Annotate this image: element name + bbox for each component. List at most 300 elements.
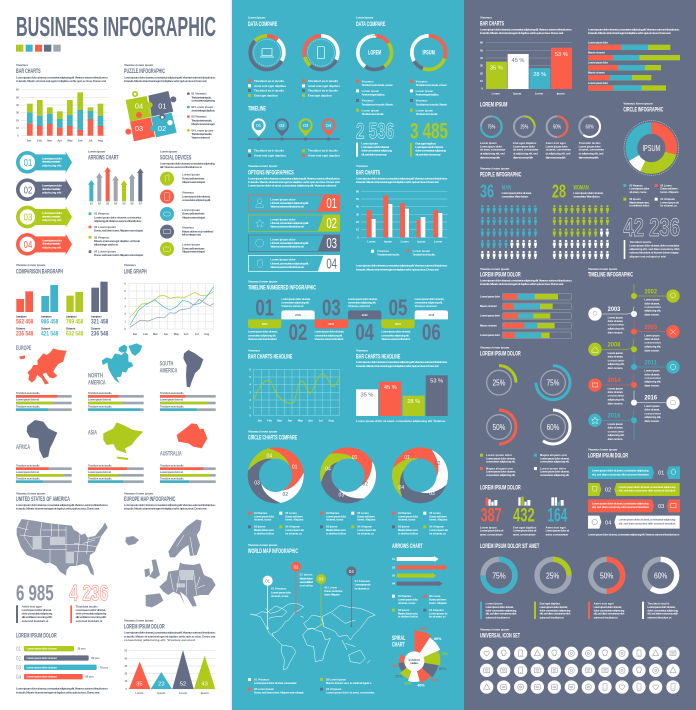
horizontal bars: Lorem ipsum dolor sit amet xyxy=(27,656,57,660)
teal bar chart: 40 xyxy=(356,205,359,209)
donut 2 phone xyxy=(304,36,338,70)
timeline xyxy=(248,105,340,141)
spiral chart: 60% xyxy=(434,637,442,641)
timeline infographic heading: TIMELINE INFOGRAPHIC xyxy=(588,272,633,279)
spiral chart: BUSINESS xyxy=(409,658,420,662)
universal icon set: Vivamus lorem ipsum xyxy=(480,628,510,632)
social devices list: Lorem Ipsum xyxy=(182,173,200,177)
timeline captions: Lorem ipsum xyxy=(608,386,624,390)
progress bars: Lorem ipsum dolor xyxy=(480,294,500,298)
dual rings legend: consectetur adipiscing elit, xyxy=(540,473,570,477)
swirl chart 3: 03 xyxy=(429,491,435,497)
triangle chart: Lorem xyxy=(179,691,188,695)
lorem ipsum small rings: ut adipiscing elit, sed xyxy=(579,151,604,155)
dual rings heading: LOREM IPSUM DOLOR xyxy=(480,350,521,357)
line graph: 0 xyxy=(124,327,126,331)
stat 42 236 xyxy=(623,215,680,259)
arrows chart legend: tellus integer erat leo at xyxy=(94,243,118,247)
map pins: 02 xyxy=(294,564,299,569)
timeline captions: Vivamus euismod xyxy=(415,304,437,308)
map: africa: AFRICA xyxy=(16,444,30,451)
comparison heading: Vivamus lorem ipsum xyxy=(16,263,46,267)
swirl legends: 04 Aliquam xyxy=(285,525,301,529)
timeline captions: consectetur adipiscing elit. xyxy=(315,333,343,337)
puzzle graphic: 04 xyxy=(135,101,143,110)
mini-bar stats: LOREM IPSUM DOLOR xyxy=(480,484,521,491)
map: south america: SOUTH xyxy=(160,361,174,368)
lorem ipsum small rings: diam nonummy nibh xyxy=(579,155,599,159)
teal chart legend: Lorem ipsum dolor sit amet, consectetur adipiscing elit. Vivamus euismod tincidunt eu xyxy=(356,264,447,268)
panel: slate column xyxy=(464,0,696,710)
dual rings: 50% xyxy=(493,422,506,432)
timeline infographic heading xyxy=(588,267,633,279)
progress heading: in iaculis. Mauris sit amet erat eget mi dapibus vehic quis ac risus. Donec erat xyxy=(480,282,563,286)
comparison values: Lorem ipsum xyxy=(41,315,52,319)
puzzle heading: Lorem ipsum dolor sit amet, consectetur adipiscing elit. Vivamus euismod tincidunt eu xyxy=(124,75,215,79)
stacked horizontal bars: Mauris sit amet xyxy=(588,51,605,55)
slate bar chart: 35 % xyxy=(490,66,503,72)
horizontal bars: 03 xyxy=(16,665,21,672)
swirl legends: 02 Lorem xyxy=(429,511,441,515)
arrow label 03: adipiscing elit. xyxy=(42,218,62,222)
lorem ipsum small rings: 75% xyxy=(487,124,496,130)
timeline captions: adipiscing elit, xyxy=(644,309,661,313)
puzzle heading xyxy=(124,63,215,83)
triangle chart heading: Vivamus lorem ipsum xyxy=(124,618,154,622)
arrow label 04 xyxy=(16,233,72,256)
swirl legends: 02 Lorem xyxy=(285,511,297,515)
option row 01 xyxy=(248,195,340,212)
stacked bar chart: Apr xyxy=(57,138,62,142)
map progress bars row 1: Tincidunt ea in iaculis. xyxy=(16,404,40,408)
timeline numbered heading: TIMELINE NUMBERED INFOGRAPHIC xyxy=(248,284,316,291)
data compare heading right: DATA COMPARE xyxy=(356,21,385,28)
donut legend left: Erat eget dapibus xyxy=(308,94,332,98)
large ring captions: euismod tincidunt ut xyxy=(647,615,671,619)
stat 42 236: euismod tincidunt ut laoreet dolore magna xyxy=(629,251,679,255)
arrows chart legend xyxy=(89,212,143,257)
data compare heading left xyxy=(248,16,277,28)
curve chart: 2 xyxy=(249,398,251,402)
triangle chart: 52 xyxy=(180,682,186,688)
world map legend: Lorem ipsum dolor sit amet, consectetur xyxy=(254,681,297,685)
horizontal bars: 01 xyxy=(16,646,21,653)
horizontal bars: Lorem ipsum dolor sit amet xyxy=(27,665,57,669)
timeline captions: consectetur adipiscing elit. xyxy=(415,301,443,305)
large rings: 25% xyxy=(546,570,560,580)
swirl legends: 04 Aliquam xyxy=(429,525,445,529)
stacked bar chart: 20 xyxy=(16,118,19,122)
timeline captions: diam nonum. xyxy=(644,384,660,388)
map progress bars row 1 xyxy=(16,391,216,411)
comparison bars xyxy=(16,282,108,312)
mini-bar stats: 432 xyxy=(513,506,535,527)
data compare heading left: DATA COMPARE xyxy=(248,21,277,28)
arrow label 01 xyxy=(16,151,72,174)
timeline captions: consectetur adipiscing elit. xyxy=(248,333,276,337)
timeline captions: Lorem ipsum dolor sit amet, xyxy=(415,297,444,301)
curve chart: 3 xyxy=(249,390,251,394)
line graph: Feb xyxy=(143,332,148,336)
swirl legends: 01 Vivamus xyxy=(398,511,412,515)
triangle chart heading: in iaculis. Mauris sit amet erat eget mi dapibus vehic quis ac risus. Donec erat xyxy=(124,634,215,638)
timeline captions: adipiscing elit, xyxy=(644,344,661,348)
ribbon row 02 xyxy=(588,483,680,496)
ribbons heading: LOREM IPSUM DOLOR xyxy=(588,452,628,459)
curve chart: Mar xyxy=(277,418,282,422)
donut legend left: Tincidunt ea in iaculis xyxy=(254,79,284,83)
swirl legends: Lorem ipsum do xyxy=(357,528,376,532)
timeline captions: consectetur xyxy=(608,429,624,433)
options heading: Vivamus lorem ipsum xyxy=(248,164,278,168)
puzzle legend: consectetur adipiscing. xyxy=(191,99,215,103)
large ring captions: Lorem ipsum dolor sit amet, xyxy=(486,605,514,609)
map pins: lor sit amet, co xyxy=(355,586,370,590)
line graph: Jan xyxy=(133,332,138,336)
map progress bars row 2: Lorem ipsum dolor sit. xyxy=(88,470,112,474)
triangle chart xyxy=(124,649,215,695)
line graph: Jun xyxy=(184,332,189,336)
ribbon row 01: 01 xyxy=(658,471,664,477)
timeline years: 2016 xyxy=(644,395,657,402)
triangle chart: Lorem xyxy=(135,691,144,695)
dual rings: 75% xyxy=(547,378,560,388)
circle charts heading: Vivamus lorem ipsum xyxy=(248,429,278,433)
usa heading: Lorem ipsum dolor sit amet, consectetur adipiscing elit. Vivamus euismod tincidunt eu xyxy=(16,503,108,507)
large ring captions: dolor consectetur adipiscing xyxy=(647,608,678,612)
swirl legends: Mauris dictum sem, xyxy=(254,528,274,532)
map pins: Mauris dictum xyxy=(300,576,314,580)
stat 4 236: dolor consectetur adipiscing xyxy=(76,611,106,615)
donut legend right: Lorem Ipsum xyxy=(416,108,434,112)
arrow label 01: 01 xyxy=(24,158,33,169)
curve chart: Jan xyxy=(257,418,262,422)
social devices list: Lorem Ipsum xyxy=(182,208,200,212)
arrows chart: 01 xyxy=(90,202,93,206)
swirl legends: Lorem ipsum do xyxy=(285,528,304,532)
timeline captions: consectetur xyxy=(644,376,661,380)
lorem ipsum small rings: sit amet, consectetur xyxy=(579,148,604,152)
swirl legends: Mauris dictum sem, xyxy=(326,528,346,532)
arrows chart heading xyxy=(88,150,119,162)
swirl legends: 02 Lorem xyxy=(357,511,369,515)
timeline captions: Lorem ipsum xyxy=(644,333,660,337)
map progress bars row 2: Lorem ipsum dolor sit. xyxy=(16,470,40,474)
timeline captions: adipiscing elit, xyxy=(644,415,661,419)
stacked horizontal bars xyxy=(588,41,680,91)
big percentage bars: 53 % xyxy=(430,379,443,385)
circle infographic legend: 02 Lorem xyxy=(660,183,672,187)
lorem ipsum small rings: diam nonummy nibh xyxy=(546,155,566,159)
teal bar chart: Lorem xyxy=(401,239,409,243)
bar charts heading: Vivamus xyxy=(16,63,28,67)
triangle chart: 50 xyxy=(124,649,128,653)
slate bar charts heading: in iaculis. Mauris sit amet erat eget mi dapibus vehic quis ac risus. Donec erat xyxy=(480,31,563,35)
arrows chart legend xyxy=(392,594,448,619)
usa heading: in iaculis. Mauris sit amet erat eget mi dapibus vehic quis ac risus. Donec erat xyxy=(16,507,99,511)
arrows chart legend: sit amet, conse xyxy=(398,601,416,605)
timeline captions: dolor sit amet, xyxy=(644,408,660,412)
map: north america xyxy=(88,343,142,386)
donut 4 ipsum xyxy=(412,36,446,70)
timeline legend xyxy=(248,149,340,158)
map progress bars row 1: Lorem ipsum dolor sit. xyxy=(88,398,112,402)
donut legend right: Lorem Ipsum xyxy=(416,89,434,93)
timeline legend: Amet erat eget dapibus xyxy=(254,154,286,158)
circle infographic legend: Donec sed lorem xyxy=(660,187,678,191)
arrows chart legend: Donec sed lorem tortor. Aliquam erat volutpat. xyxy=(94,253,143,257)
ribbons heading: Vivamus lorem ipsum xyxy=(588,447,618,451)
swirl chart 1 xyxy=(248,447,304,503)
option row 03: Vivamus euismod tincidunt eu in. xyxy=(270,245,304,249)
dual rings xyxy=(482,366,570,444)
large ring captions: Lorem ipsum dolor sit amet, xyxy=(594,605,622,609)
ribbon row 02: 02 xyxy=(605,488,611,494)
stat 6 985 xyxy=(16,581,54,623)
puzzle legend: Tincidunt ea in iaculis, xyxy=(191,95,211,99)
teal bar charts heading xyxy=(356,164,447,184)
teal bar chart: 30 xyxy=(356,212,359,216)
arrow label 04: sit amet, consectetur xyxy=(42,242,61,246)
spiral chart: 80% xyxy=(420,627,428,631)
timeline captions: Lorem ipsum xyxy=(644,298,660,302)
arrow label 01: Lorem ipsum dolor xyxy=(42,156,63,160)
comparison values: 562 458 xyxy=(16,319,34,326)
timeline infographic heading: Vivamus lorem ipsum xyxy=(588,267,618,271)
map progress bars row 1: Tincidunt ea in iaculis. xyxy=(160,391,184,395)
puzzle legend: amet erat eget dapibus. xyxy=(191,109,215,113)
slate bar chart: 45 % xyxy=(512,58,524,64)
progress heading xyxy=(480,267,572,286)
stat 6 985: Amet erat eget xyxy=(22,605,42,609)
swirl legends: in eleifend tellus xyxy=(254,531,275,535)
option row 01: Vivamus euismod tincidunt eu in. xyxy=(270,205,304,209)
stat 3 485: dolor consectetur adipiscing xyxy=(415,149,446,153)
people infographic: MAN xyxy=(502,185,512,192)
teal bar charts heading: Vivamus xyxy=(356,164,368,168)
slate bar chart: 60 xyxy=(480,41,483,45)
slate bar chart: 28 % xyxy=(533,72,546,78)
swirl chart 3: 02 xyxy=(435,461,441,467)
map: europe xyxy=(16,345,67,384)
teal chart legend: Tincidunt ea in iaculis. xyxy=(413,253,436,257)
donut legend right: Vivamus xyxy=(362,99,374,103)
arrows chart: 05 xyxy=(123,202,126,206)
usa and europe maps section xyxy=(16,491,216,695)
dual rings legend: consectetur adipiscing elit, xyxy=(486,460,516,464)
teal chart legend: Tincidunt ea in iaculis. xyxy=(377,253,400,257)
arrows chart legend: adipiscing elit. Vivamus euismod tincidunt eu xyxy=(94,219,141,223)
large rings: LOREM IPSUM DOLOR SIT AMET xyxy=(480,543,539,550)
arrows chart legend: 04 Aliquam xyxy=(429,608,444,612)
dual rings heading xyxy=(480,345,521,357)
triangle chart: 35 xyxy=(136,682,142,688)
lorem ipsum small rings: Lorem ipsum dolor xyxy=(546,144,568,148)
comparison values: Lorem ipsum xyxy=(16,315,27,319)
stacked bar chart: 10 xyxy=(16,126,19,130)
europe map heading: Lorem ipsum dolor sit amet, consectetur adipiscing elit. Vivamus euismod tincidunt eu xyxy=(124,503,215,507)
people infographic: Lorem ipsum dolor sit amet, xyxy=(502,191,532,195)
stat 6 985: Lorem ipsum dolor sit amet, xyxy=(22,608,52,612)
timeline legend: Amet erat eget dapibus xyxy=(308,154,340,158)
timeline captions: Lorem ipsum dolor sit amet, xyxy=(348,297,378,301)
mini-bar stats: amet, consectetuer xyxy=(480,532,503,536)
donut 1 laptop xyxy=(250,36,284,70)
swirl legends: Lorem ipsum dolor xyxy=(326,514,346,518)
lorem ipsum small rings: diam nonummy nibh xyxy=(513,155,533,159)
europe map heading: EUROPE MAP INFOGRAPHIC xyxy=(124,496,176,503)
large ring captions: euismod tincidunt ut xyxy=(594,615,618,619)
circle infographic heading xyxy=(623,102,664,114)
map: africa xyxy=(16,420,57,458)
arrows chart: 03 xyxy=(106,202,110,206)
line graph: Jul xyxy=(195,332,199,336)
slate bar chart: 40 xyxy=(480,56,483,60)
option row 04: Lorem Ipsum dolor xyxy=(270,258,296,262)
map: north america: AMERICA xyxy=(88,379,106,386)
stat 6 985: elit, sed diam nonummy nibh xyxy=(22,615,52,619)
timeline captions: adipiscing elit, xyxy=(608,433,625,437)
teal bar chart: 10 xyxy=(356,228,359,232)
slate bar chart: 10 xyxy=(480,79,483,83)
lorem ipsum small rings: Lorem ipsum dolor xyxy=(579,144,601,148)
arrows chart legend: in eleifend tellus xyxy=(398,615,419,619)
swirl chart 2: 01 xyxy=(352,455,358,461)
circle infographic heading: Vivamus lorem ipsum xyxy=(623,102,653,106)
stacked bar chart: Feb xyxy=(37,138,42,142)
stat 6 985: dolor consectetur adipiscing xyxy=(22,611,52,615)
swirl legends: lorem. Aliquam xyxy=(357,518,376,522)
horizontal bars: 60 pcs xyxy=(91,656,100,660)
europe map heading xyxy=(124,491,215,511)
timeline captions: dolor sit amet, xyxy=(644,337,660,341)
timeline captions: diam nonum. xyxy=(608,330,623,334)
slate bar chart: 20 xyxy=(480,71,483,75)
teal bar chart: 60 xyxy=(356,189,359,193)
timeline captions: adipiscing elit, xyxy=(644,380,661,384)
people infographic: consectetur. Vitae dictum. xyxy=(573,195,600,199)
option row 03: Ut amet, consectetur adipiscing elit. xyxy=(270,241,309,245)
timeline captions: diam nonum. xyxy=(608,366,623,370)
arrow label 04: 04 xyxy=(24,240,33,251)
circle infographic legend: Lorem ipsum dolor xyxy=(629,187,649,191)
map: australia xyxy=(160,423,207,458)
big percentage bars xyxy=(356,375,448,423)
slate bar chart: Ipsum xyxy=(513,92,522,96)
stat 6 985: euismod tincidunt ut xyxy=(22,619,48,623)
slate bar charts heading: in iaculis. Mauris sit amet erat eget mi dapibus vehic quis ac risus. Donec erat xyxy=(588,31,671,35)
timeline numbered section xyxy=(248,279,458,514)
bar charts headline left heading: Vivamus xyxy=(248,348,260,352)
panel: teal column xyxy=(232,0,464,710)
map pins: erat tellus xyxy=(300,584,314,588)
social devices list: Donec sed lorem tortor xyxy=(182,176,205,180)
comparison values: 321 458 xyxy=(91,319,109,326)
title: BUSINESS INFOGRAPHIC xyxy=(16,11,216,42)
lorem ipsum small rings: 60% xyxy=(586,124,594,130)
horizontal bars: 35 pcs xyxy=(77,647,86,651)
dual rings: 60% xyxy=(547,422,560,432)
timeline captions: Vivamus euismod tincidunt xyxy=(315,337,343,341)
timeline captions: consectetur xyxy=(608,358,624,362)
donut legend right: Amet erat eget dapibus. xyxy=(362,93,385,97)
ribbon row 04 xyxy=(588,516,680,536)
donut legend right: Vivamus xyxy=(416,99,428,103)
timeline captions: consectetur adipiscing elit. xyxy=(281,301,310,305)
circle infographic legend: lor sit amet, co xyxy=(660,204,677,208)
horizontal bars: Lorem ipsum dolor sit amet, consectetur adipiscing elit. Vivamus euismod tincidunt eu xyxy=(16,687,108,691)
curve chart: Jun xyxy=(308,418,313,422)
timeline captions: Vivamus euismod xyxy=(281,304,304,308)
lorem ipsum small rings: diam nonummy nibh xyxy=(480,155,500,159)
map: south america: AMERICA xyxy=(160,368,178,375)
timeline captions: diam nonum. xyxy=(644,419,660,423)
arrow label 03: Lorem ipsum dolor xyxy=(42,211,63,215)
spiral chart: CHART xyxy=(392,642,405,649)
map progress bars row 2: Tincidunt ea in iaculis. xyxy=(88,463,112,467)
progress heading: Lorem ipsum dolor sit amet, consectetur adipiscing elit. Vivamus euismod tincidunt eu xyxy=(480,278,572,282)
map pins: 01 Vivamus xyxy=(271,587,287,591)
people infographic: Lorem ipsum dolor sit amet, xyxy=(573,191,604,195)
donut legend left: Amet erat eget dapibus xyxy=(308,84,340,88)
swirl legends: sit amet, conse xyxy=(254,518,272,522)
map: south america xyxy=(160,350,203,387)
swirl legends: 04 Aliquam xyxy=(357,525,373,529)
large ring captions: euismod tincidunt ut xyxy=(540,615,564,619)
slate bar charts heading: BAR CHARTS xyxy=(480,21,504,28)
slate bar charts heading xyxy=(480,16,679,35)
stat 3 485: Lorem ipsum dolor sit amet, xyxy=(415,145,443,149)
stat 42 236: aliquam erat volutpat ut wisi xyxy=(629,255,666,259)
timeline big numbers xyxy=(255,294,441,345)
swirl legends: lor sit amet, co xyxy=(357,531,374,535)
swirl chart 1: 01 xyxy=(292,465,298,471)
donut legend left: Erat eget dapibus xyxy=(254,94,278,98)
timeline captions: consectetur xyxy=(608,323,624,327)
option row 01: 01 xyxy=(326,196,337,212)
option row 04: Vivamus euismod tincidunt eu in. xyxy=(270,265,304,269)
bar charts heading: BAR CHARTS xyxy=(16,68,41,75)
ribbon row 04: Lorem ipsum dolor sit amet, consectetur adipiscing elit. Vivamus euismod tincidunt eu in xyxy=(588,532,680,536)
ribbon row 02: elit, sed diam nonummy nibh euismod tincidunt xyxy=(619,489,675,493)
comparison bargraph section xyxy=(16,263,216,483)
curve chart: Apr xyxy=(288,418,292,422)
puzzle graphic: 03 xyxy=(135,124,143,133)
swirl legends: Lorem ipsum do xyxy=(429,528,448,532)
swirl legends: sit amet, conse xyxy=(326,518,344,522)
swirl chart 2: 03 xyxy=(339,492,344,498)
stacked horizontal bars: Lorem ipsum dolor xyxy=(588,61,608,65)
puzzle legend xyxy=(187,92,215,139)
stat 4 236: elit, sed diam nonummy nibh xyxy=(76,615,106,619)
data compare heading left: Lorem Ipsum xyxy=(248,16,266,20)
progress bars xyxy=(480,293,572,339)
social devices list: Mauris dolore sed, in eleifend xyxy=(182,229,213,233)
arrow label 03: 03 xyxy=(24,213,33,224)
large ring captions: euismod tincidunt ut xyxy=(486,615,510,619)
spiral chart: Lorem ipsum xyxy=(410,661,419,665)
arrows chart: 04 xyxy=(114,202,118,206)
dual rings legend: consectetur adipiscing elit, xyxy=(486,473,516,477)
option row 04 xyxy=(248,255,340,272)
options heading xyxy=(248,164,340,188)
mini-bar stats: Lorem ipsum dolor sit xyxy=(546,529,569,533)
stacked bar chart: Mar xyxy=(47,138,52,142)
stacked bar chart: 50 xyxy=(16,95,19,99)
map pins: 02 Ipsum xyxy=(300,573,313,577)
line graph: 2 xyxy=(124,312,126,316)
donut legend right: Tincidunt ea in iaculis. Mauris xyxy=(416,102,448,106)
